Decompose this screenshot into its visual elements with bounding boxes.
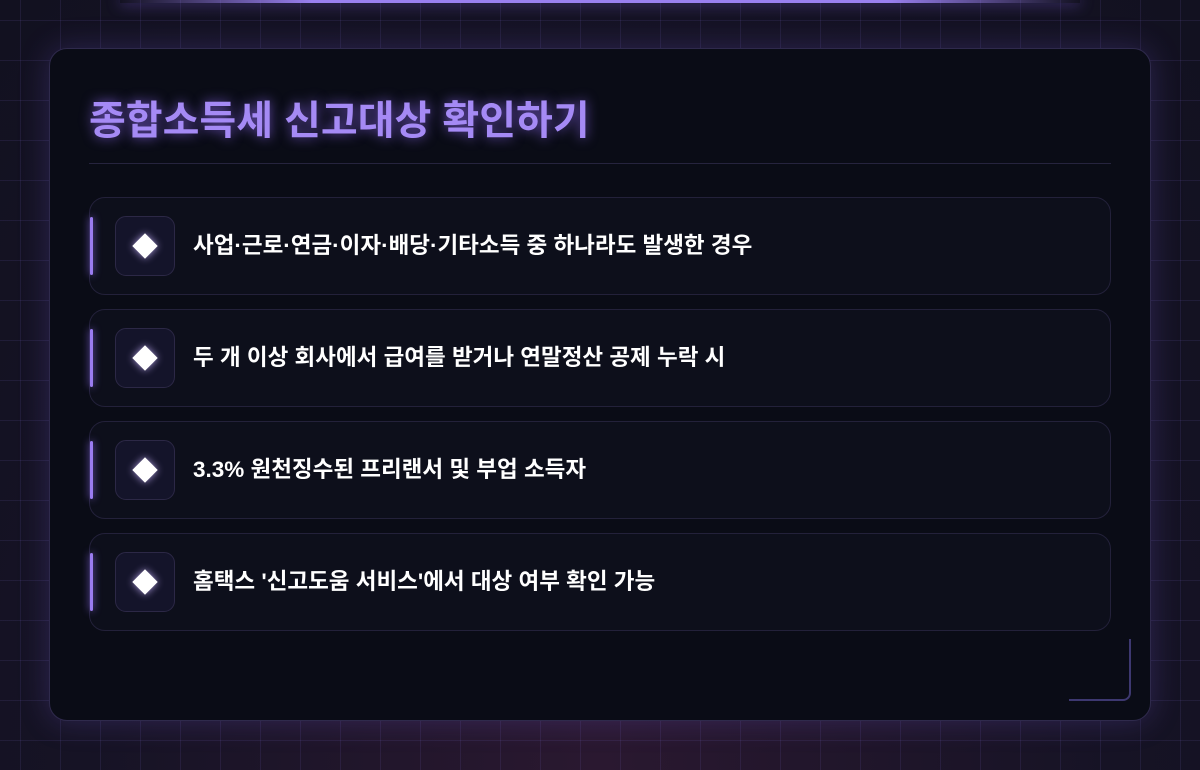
text 1: 사업·근로·연금·이자·배당·기타소득 중 하나라도 발생한 경우: [193, 233, 752, 258]
icon: diamond: [115, 440, 175, 500]
item 3: [89, 421, 1111, 519]
item 2: [89, 309, 1111, 407]
text 3: 3.3% 원천징수된 프리랜서 및 부업 소득자: [193, 457, 586, 482]
icon: diamond: [115, 216, 175, 276]
icon: diamond: [115, 552, 175, 612]
text 4: 홈택스 '신고도움 서비스'에서 대상 여부 확인 가능: [193, 569, 655, 594]
corner bracket: [1069, 639, 1131, 701]
title: 종합소득세 신고대상 확인하기: [89, 99, 590, 143]
item 1: [89, 197, 1111, 295]
text 2: 두 개 이상 회사에서 급여를 받거나 연말정산 공제 누락 시: [193, 345, 725, 370]
item 4: [89, 533, 1111, 631]
icon: diamond: [115, 328, 175, 388]
